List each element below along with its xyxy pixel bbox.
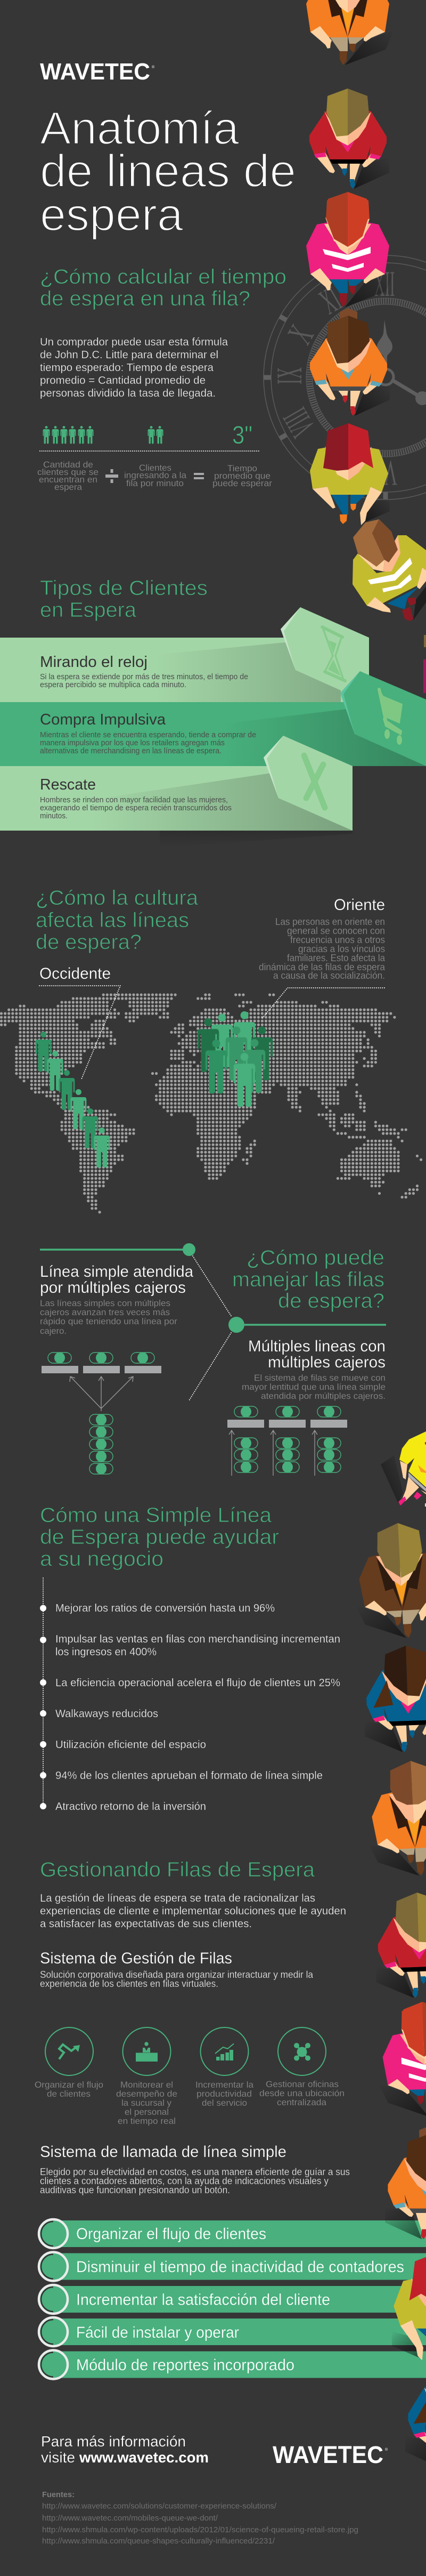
person: pink sweater red hair: [306, 192, 394, 307]
feature: monitorear: [116, 2027, 177, 2126]
feature: gestionar oficinas: Gestionar oficinas: [266, 2079, 339, 2089]
person: pink sweater, right column: [376, 2000, 426, 2119]
feature bar 1: [39, 2219, 426, 2248]
text: mirando el reloj: [40, 654, 248, 689]
person: man olive with stripes, turned: [353, 519, 426, 621]
feature bar 4: Fácil de instalar y operar: [76, 2324, 239, 2341]
text block: Little formula: personas dividido la tasa de llegada.: [40, 388, 216, 399]
text block: linea simple: rápido que teniendo una línea por: [40, 1316, 177, 1326]
text: mirando el reloj: Mirando el reloj: [40, 654, 148, 671]
sources: http://www.wavetec.com/solutions/customer-experience-solutions/: [42, 2502, 277, 2511]
text block: Little formula: Un comprador puede usar esta fórmula: [40, 336, 228, 348]
text: mirando el reloj: Si la espera se extiende por más de tres minutos, el tiempo de: [40, 673, 248, 681]
call to action: www.wavetec.com: [79, 2449, 209, 2466]
list: benefits: Impulsar las ventas en filas con merchandising incrementan: [55, 1633, 340, 1645]
logo: Wavetec header: WAVETEC: [40, 59, 150, 85]
clock illustration behind the queue: [264, 255, 426, 500]
heading: tipos de clientes: [40, 577, 208, 622]
chart: dotted world map: [1, 995, 421, 1212]
call to action: visite: [41, 2449, 75, 2466]
icon tag: X: [264, 736, 353, 830]
icon group: eastern clustered people: [198, 1011, 273, 1107]
heading: calcular el tiempo de espera: [40, 265, 286, 310]
text: compra impulsiva: manera impulsiva por los que los retailers agregan más: [40, 739, 225, 747]
text block: multiples lineas: [242, 1338, 386, 1401]
icon: division sign: [105, 469, 118, 483]
text block: Little formula: [40, 336, 228, 399]
number: 3 minutes: 3": [232, 421, 252, 449]
person: man orange jacket, right column: [364, 1759, 426, 1878]
text: compra impulsiva: Mientras el cliente se encuentra esperando, tiende a comprar de: [40, 731, 256, 739]
text block: Little formula: promedio = Cantidad promedio de: [40, 375, 206, 387]
text block: oriente: [259, 896, 386, 981]
icon: six waiting customers: [43, 426, 94, 444]
text block: linea simple: cajeros avanzan tres veces más: [40, 1307, 170, 1317]
person: cropped figure at edge: [423, 635, 426, 693]
label: cantidad de clientes: encuentran en: [39, 474, 97, 485]
icon: podium: [136, 2042, 158, 2062]
feature: monitorear: desempeño de: [116, 2089, 177, 2099]
heading: tipos de clientes: en Espera: [40, 599, 136, 622]
text block: multiples lineas: El sistema de filas se mueve con: [254, 1373, 386, 1383]
text: rescate: exagerando el tiempo de espera recién transcurridos dos: [40, 804, 232, 812]
label: clientes por minuto: ingresando a la: [124, 470, 187, 480]
feature: monitorear: el personal: [125, 2107, 169, 2117]
call to action: Para más información: [41, 2433, 186, 2450]
text: compra impulsiva: alternativas de merchandising en las líneas de espera.: [40, 747, 222, 755]
list: benefits: Mejorar los ratios de conversión hasta un 96%: [55, 1603, 275, 1614]
person: woman blue jacket: [362, 1644, 426, 1753]
person: woman orange, right column: [385, 2126, 426, 2239]
list: benefits: La eficiencia operacional acelera el flujo de clientes un 25%: [55, 1677, 340, 1689]
subheading: sistema de llamada: Sistema de llamada de línea simple: [40, 2143, 286, 2161]
clock illustration behind the queue: VI: [378, 453, 397, 494]
title: [40, 103, 296, 240]
text: compra impulsiva: Compra Impulsiva: [40, 711, 166, 728]
text block: Little formula: de John D.C. Little para determinar el: [40, 349, 218, 361]
logo: Wavetec footer: ®: [385, 2448, 388, 2452]
label: cantidad de clientes: [37, 460, 99, 492]
feature: gestionar oficinas: centralizada: [277, 2097, 327, 2107]
text block: gestion: experiencias de cliente e implementar soluciones que le ayuden: [40, 1905, 346, 1917]
feature bar 2: Disminuir el tiempo de inactividad de contadores: [76, 2258, 404, 2276]
panel: shadow below rescate: [160, 831, 353, 848]
call to action: [41, 2433, 209, 2466]
text block: oriente: a causa de la socialización.: [273, 970, 385, 981]
icon: zigzag arrow: [59, 2044, 80, 2059]
text block: multiples lineas: mayor lentitud que una línea simple: [242, 1382, 386, 1392]
text block: oriente: frecuencia unos a otros: [290, 935, 385, 945]
label: cantidad de clientes: Cantidad de: [43, 460, 93, 470]
text block: oriente: dinámica de las filas de espera: [259, 962, 386, 972]
feature bar 3: Incrementar la satisfacción del cliente: [76, 2291, 330, 2308]
subheading: sistema de gestion: experiencia de los clientes en filas virtuales.: [40, 1978, 218, 1989]
feature: incrementar: Incrementar la: [195, 2080, 254, 2090]
subheading: sistema de llamada: [40, 2143, 350, 2195]
feature: gestionar oficinas: [259, 2027, 345, 2107]
clock illustration behind the queue: VIII: [275, 401, 323, 444]
text block: oriente: familiares. Esto afecta la: [287, 953, 386, 963]
person: woman blue, right column: [405, 2363, 426, 2468]
heading: simple linea de espera: Cómo una Simple Línea: [40, 1504, 272, 1527]
person: woman olive, right column: [392, 2253, 426, 2361]
subheading: sistema de llamada: Elegido por su efectividad en costos, es una manera eficiente de guíar a sus: [40, 2167, 350, 2177]
subheading: sistema de llamada: auditivas que funcionan presionando un botón.: [40, 2185, 230, 2195]
formula diagram: [37, 421, 272, 492]
text block: gestion: a satisfacer las expectativas de sus clientes.: [40, 1918, 252, 1930]
label: tiempo promedio: [212, 463, 272, 488]
feature: incrementar: del servicio: [202, 2098, 247, 2108]
person: woman red sweater, right column: [373, 1891, 426, 1999]
text: rescate: Rescate: [40, 776, 96, 793]
text block: linea simple: por múltiples cajeros: [40, 1279, 186, 1297]
subheading: sistema de gestion: Sistema de Gestión de Filas: [40, 1950, 232, 1967]
person: woman olive red hair: [310, 423, 390, 525]
feature: monitorear: en tiempo real: [118, 2116, 176, 2126]
list: benefits: Walkaways reducidos: [55, 1708, 158, 1720]
person: man brown jacket: [351, 1521, 426, 1640]
heading: cultura: de espera?: [36, 931, 142, 954]
person: woman orange with bun: [310, 308, 390, 416]
sources: Fuentes:: [42, 2491, 75, 2499]
heading: simple linea de espera: a su negocio: [40, 1548, 163, 1571]
person: woman red sweater: [309, 88, 389, 189]
text block: multiples lineas: múltiples cajeros: [268, 1354, 386, 1371]
heading: tipos de clientes: Tipos de Clientes: [40, 577, 208, 600]
title: espera: [40, 189, 183, 240]
icon group: western single-file people: [36, 1032, 110, 1168]
label: tiempo promedio: Tiempo: [227, 463, 257, 473]
title: de lineas de: [40, 146, 296, 197]
subheading: sistema de gestion: Solución corporativa diseñada para organizar interactuar y medir la: [40, 1969, 314, 1980]
person: woman yellow, turned: [381, 1431, 426, 1507]
label: cantidad de clientes: clientes que se: [37, 467, 99, 477]
callout lines: occidente and oriente: [39, 986, 384, 1079]
panel: mirando el reloj: [0, 607, 369, 702]
text block: gestion: [40, 1893, 346, 1930]
list: benefits: [40, 1578, 340, 1813]
panel: compra impulsiva: [0, 671, 426, 766]
heading: cultura: afecta las líneas: [36, 909, 189, 932]
list: benefits: 94% de los clientes aprueban el formato de línea simple: [55, 1770, 323, 1782]
text block: oriente: Las personas en oriente en: [275, 916, 385, 927]
label: cantidad de clientes: espera: [54, 482, 83, 492]
label: occidente: Occidente: [39, 965, 111, 983]
clock illustration behind the queue: X: [280, 318, 321, 350]
text: mirando el reloj: espera percibido se multiplica cada minuto.: [40, 681, 186, 689]
feature: incrementar: [195, 2027, 254, 2108]
icon: rising bars: [215, 2044, 234, 2060]
heading: simple linea de espera: [40, 1504, 279, 1571]
connector: branching lines: [40, 1243, 386, 1400]
clock illustration behind the queue: XI: [313, 278, 348, 322]
text block: multiples lineas: Múltiples lineas con: [248, 1338, 386, 1355]
text block: oriente: gracias a los vínculos: [298, 944, 385, 954]
text block: oriente: Oriente: [334, 896, 385, 914]
text block: linea simple: Línea simple atendida: [40, 1263, 193, 1281]
sources: http://www.shmula.com/wp-content/uploads/2012/01/science-of-queueing-retail-store.jpg: [42, 2526, 358, 2534]
logo: Wavetec header: ®: [152, 65, 155, 69]
text block: gestion: La gestión de líneas de espera se trata de racionalizar las: [40, 1893, 315, 1904]
label: clientes por minuto: fila por minuto: [126, 478, 184, 488]
text block: Little formula: tiempo esperado: Tiempo de espera: [40, 362, 214, 374]
list: benefits: Utilización eficiente del espacio: [55, 1739, 206, 1751]
subheading: sistema de gestion: [40, 1950, 314, 1989]
text block: multiples lineas: atendida por múltiples cajeros.: [261, 1391, 386, 1401]
person: man orange jacket: [306, 0, 394, 65]
list: benefits: Atractivo retorno de la inversión: [55, 1801, 206, 1813]
feature bar 4: [39, 2317, 426, 2346]
feature bar 3: [39, 2285, 426, 2314]
label: tiempo promedio: promedio que: [214, 471, 271, 481]
heading: manejar las filas: de espera?: [278, 1290, 384, 1313]
sources: [42, 2491, 358, 2546]
label: clientes por minuto: [124, 463, 187, 488]
subheading: sistema de llamada: clientes a contadores abiertos, con la ayuda de indicaciones visuales y: [40, 2176, 329, 2186]
icon: network nodes: [294, 2043, 310, 2061]
heading: simple linea de espera: de Espera puede ayudar: [40, 1526, 279, 1549]
icon: equals sign: [194, 473, 204, 479]
title: Anatomía: [40, 103, 239, 154]
heading: manejar las filas: ¿Cómo puede: [247, 1246, 384, 1269]
icon tag: hourglass: [281, 607, 369, 693]
text block: oriente: general se conocen con: [287, 925, 385, 936]
feature bar 5: [39, 2350, 426, 2379]
heading: calcular el tiempo de espera: de espera en una fila?: [40, 287, 250, 310]
sources: http://www.shmula.com/queue-shapes-culturally-influenced/2231/: [42, 2537, 275, 2546]
heading: cultura: [36, 887, 198, 954]
list: benefits: los ingresos en 400%: [55, 1646, 157, 1658]
text: rescate: Hombres se rinden con mayor facilidad que las mujeres,: [40, 796, 228, 804]
feature: organizar flujo: [35, 2027, 103, 2099]
text: compra impulsiva: [40, 711, 256, 755]
icon: two arriving customers: [148, 426, 163, 444]
feature bar 1: Organizar el flujo de clientes: [76, 2225, 266, 2243]
panel: rescate: [0, 736, 353, 831]
feature: incrementar: productividad: [196, 2089, 252, 2099]
label: tiempo promedio: puede esperar: [212, 478, 272, 488]
text block: linea simple: [40, 1263, 193, 1336]
logo: Wavetec footer: WAVETEC: [273, 2441, 383, 2468]
icon tag: shopping cart: [340, 671, 426, 766]
feature: monitorear: la sucursal y: [121, 2098, 171, 2108]
feature: monitorear: Monitorear el: [120, 2080, 173, 2090]
heading: gestionando filas: Gestionando Filas de Espera: [40, 1858, 315, 1881]
text: rescate: minutos.: [40, 812, 68, 820]
sources: http://www.wavetec.com/mobiles-queue-we-dont/: [42, 2514, 218, 2523]
text block: linea simple: cajero.: [40, 1326, 67, 1336]
heading: manejar las filas: manejar las filas: [232, 1268, 384, 1291]
diagram: single line, multiple cashiers: [42, 1352, 161, 1475]
heading: manejar las filas: [232, 1246, 384, 1313]
feature: gestionar oficinas: desde una ubicación: [259, 2088, 345, 2098]
heading: calcular el tiempo de espera: ¿Cómo calcular el tiempo: [40, 265, 286, 288]
feature: organizar flujo: de clientes: [47, 2089, 91, 2099]
clock illustration behind the queue: IX: [269, 367, 309, 384]
feature bar 2: [39, 2252, 426, 2281]
text: rescate: [40, 776, 232, 820]
feature: organizar flujo: Organizar el flujo: [35, 2080, 103, 2090]
diagram: multiple lines, multiple cashiers: [227, 1406, 347, 1476]
label: clientes por minuto: Clientes: [139, 463, 171, 473]
feature bar 5: Módulo de reportes incorporado: [76, 2356, 294, 2374]
clock illustration behind the queue: XII: [374, 263, 395, 304]
text block: linea simple: Las líneas simples con múltiples: [40, 1298, 170, 1308]
heading: cultura: ¿Cómo la cultura: [36, 887, 198, 909]
